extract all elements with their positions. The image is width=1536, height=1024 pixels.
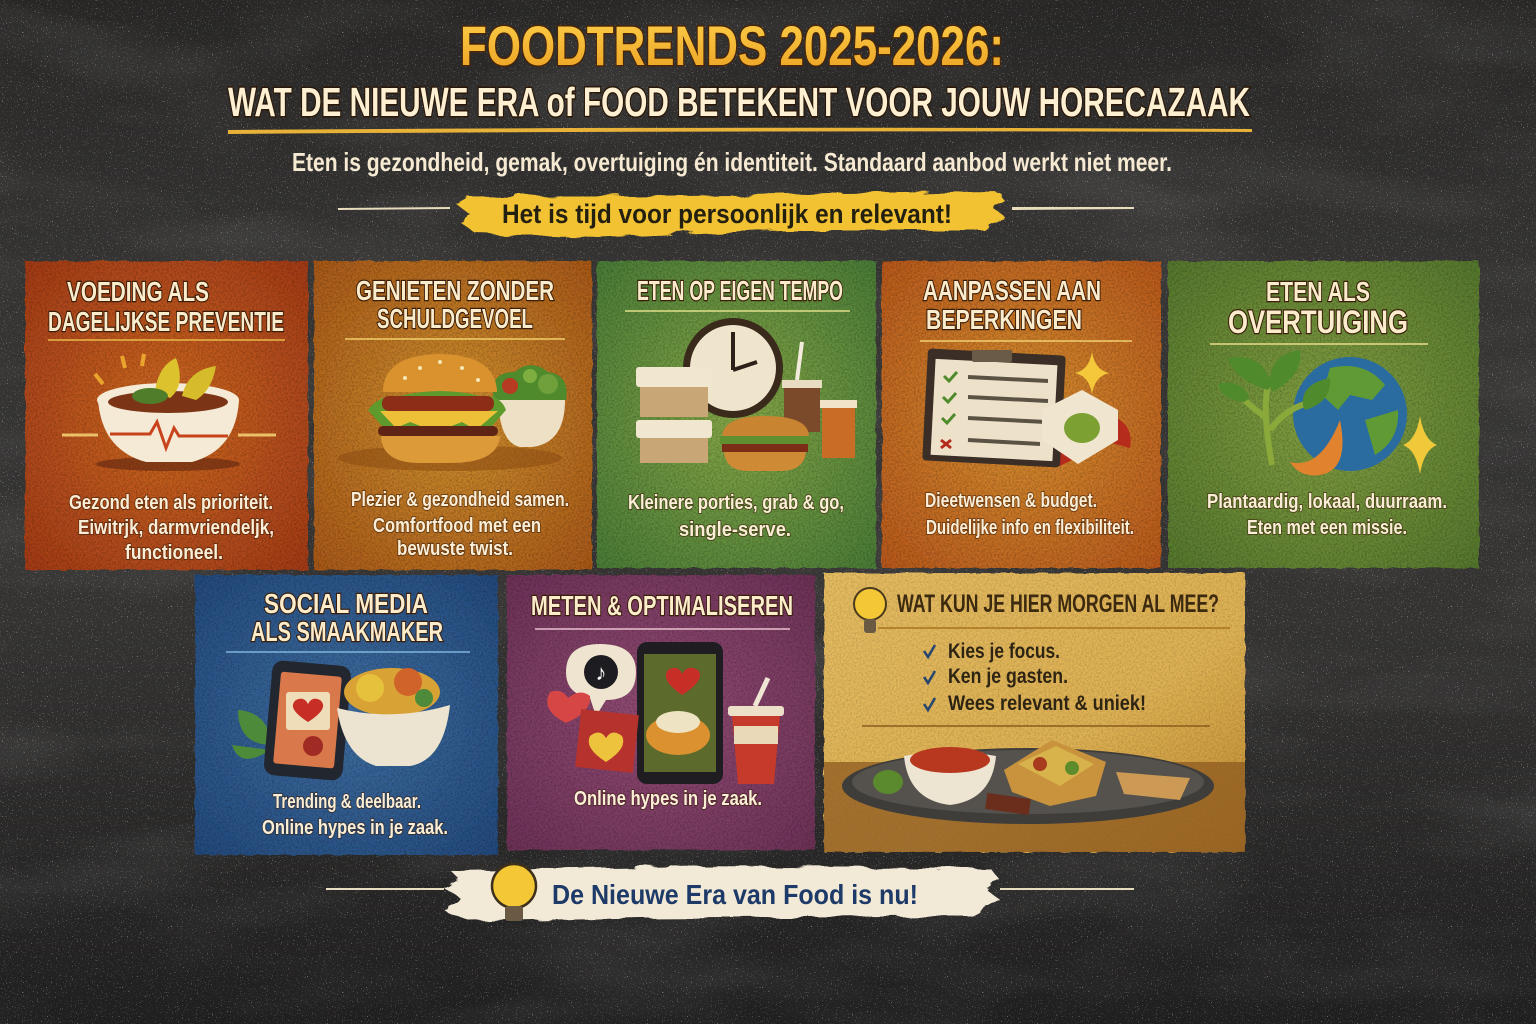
body text: Plantaardig, lokaal, duurraam. [1207,491,1447,513]
panel: eten als overtuiging: Eten met een missie. [1247,517,1407,539]
panel: social media als smaakmaker [195,575,498,855]
body text: Dieetwensen & budget. [925,490,1097,512]
panel: aanpassen aan beperkingen: Duidelijke info en flexibiliteit. [926,517,1134,539]
bottom banner [326,864,1134,922]
icon: clipboard and allergen badge [922,348,1131,468]
icon: burger and salad [338,354,567,471]
panel: aanpassen aan beperkingen: BEPERKINGEN [926,304,1082,335]
icon: soup bowl with heartbeat [62,354,276,471]
panel: voeding als dagelijkse preventie: Eiwitrjk, darmvriendeljk, [78,517,274,539]
panel: eten als overtuiging [1168,261,1479,568]
icon: plant and globe [1218,350,1437,475]
icon: tiktok bubble, phone, heart, drink: ♪ [596,660,606,685]
panel: genieten zonder schuldgevoel: bewuste twist. [397,538,513,560]
heading: SOCIAL MEDIA [264,588,428,619]
icon: light bulb [854,588,886,633]
checklist: Kies je focus. [948,640,1060,663]
body text: Plezier & gezondheid samen. [351,489,569,511]
heading: WAT KUN JE HIER MORGEN AL MEE? [897,590,1219,618]
icon: phone and salad bowl [232,660,450,781]
panel: eten als overtuiging: OVERTUIGING [1228,304,1408,340]
panel: social media als smaakmaker: Online hypes in je zaak. [262,817,448,839]
heading: GENIETEN ZONDER [356,275,554,306]
panel: voeding als dagelijkse preventie: DAGELIJKSE PREVENTIE [48,306,284,337]
yellow banner: Het is tijd voor persoonlijk en relevant! [502,199,952,229]
heading: METEN & OPTIMALISEREN [531,590,793,621]
panel: voeding als dagelijkse preventie [25,261,308,570]
title underline [228,128,1252,134]
panel: social media als smaakmaker: ALS SMAAKMAKER [251,616,443,647]
icon: tiktok bubble, phone, heart, drink [547,642,784,784]
intro text: Eten is gezondheid, gemak, overtuiging én identiteit. Standaard aanbod werkt niet meer. [292,147,1172,177]
panel: eten op eigen tempo: single-serve. [679,519,791,541]
bottom banner: De Nieuwe Era van Food is nu! [552,879,918,910]
heading: ETEN ALS [1266,276,1370,307]
body text: Kleinere porties, grab & go, [628,492,844,514]
icon: clock, containers, burger, drinks [636,318,857,471]
panel: meten en optimaliseren [507,575,815,850]
heading: VOEDING ALS [67,276,209,307]
panel: voeding als dagelijkse preventie: functioneel. [125,542,223,564]
panel: wat kun je hier morgen al mee [824,573,1245,852]
yellow banner [338,192,1134,238]
panel: genieten zonder schuldgevoel: SCHULDGEVOEL [377,303,533,334]
title: FOODTRENDS 2025-2026: [460,14,1004,77]
heading: ETEN OP EIGEN TEMPO [637,275,843,306]
icon: light bulb [492,864,536,921]
checklist [924,640,1146,715]
body text: Gezond eten als prioriteit. [69,492,273,514]
body text: Trending & deelbaar. [273,791,421,813]
icon: plate with food [842,740,1214,824]
body text: Online hypes in je zaak. [574,788,762,810]
checklist: Ken je gasten. [948,665,1068,688]
panel: aanpassen aan beperkingen [882,261,1161,568]
panel: genieten zonder schuldgevoel [314,261,592,570]
heading: AANPASSEN AAN [923,275,1101,306]
panel: eten op eigen tempo [597,261,876,568]
panel: genieten zonder schuldgevoel: Comfortfood met een [373,515,541,537]
checklist: Wees relevant & uniek! [948,692,1146,715]
